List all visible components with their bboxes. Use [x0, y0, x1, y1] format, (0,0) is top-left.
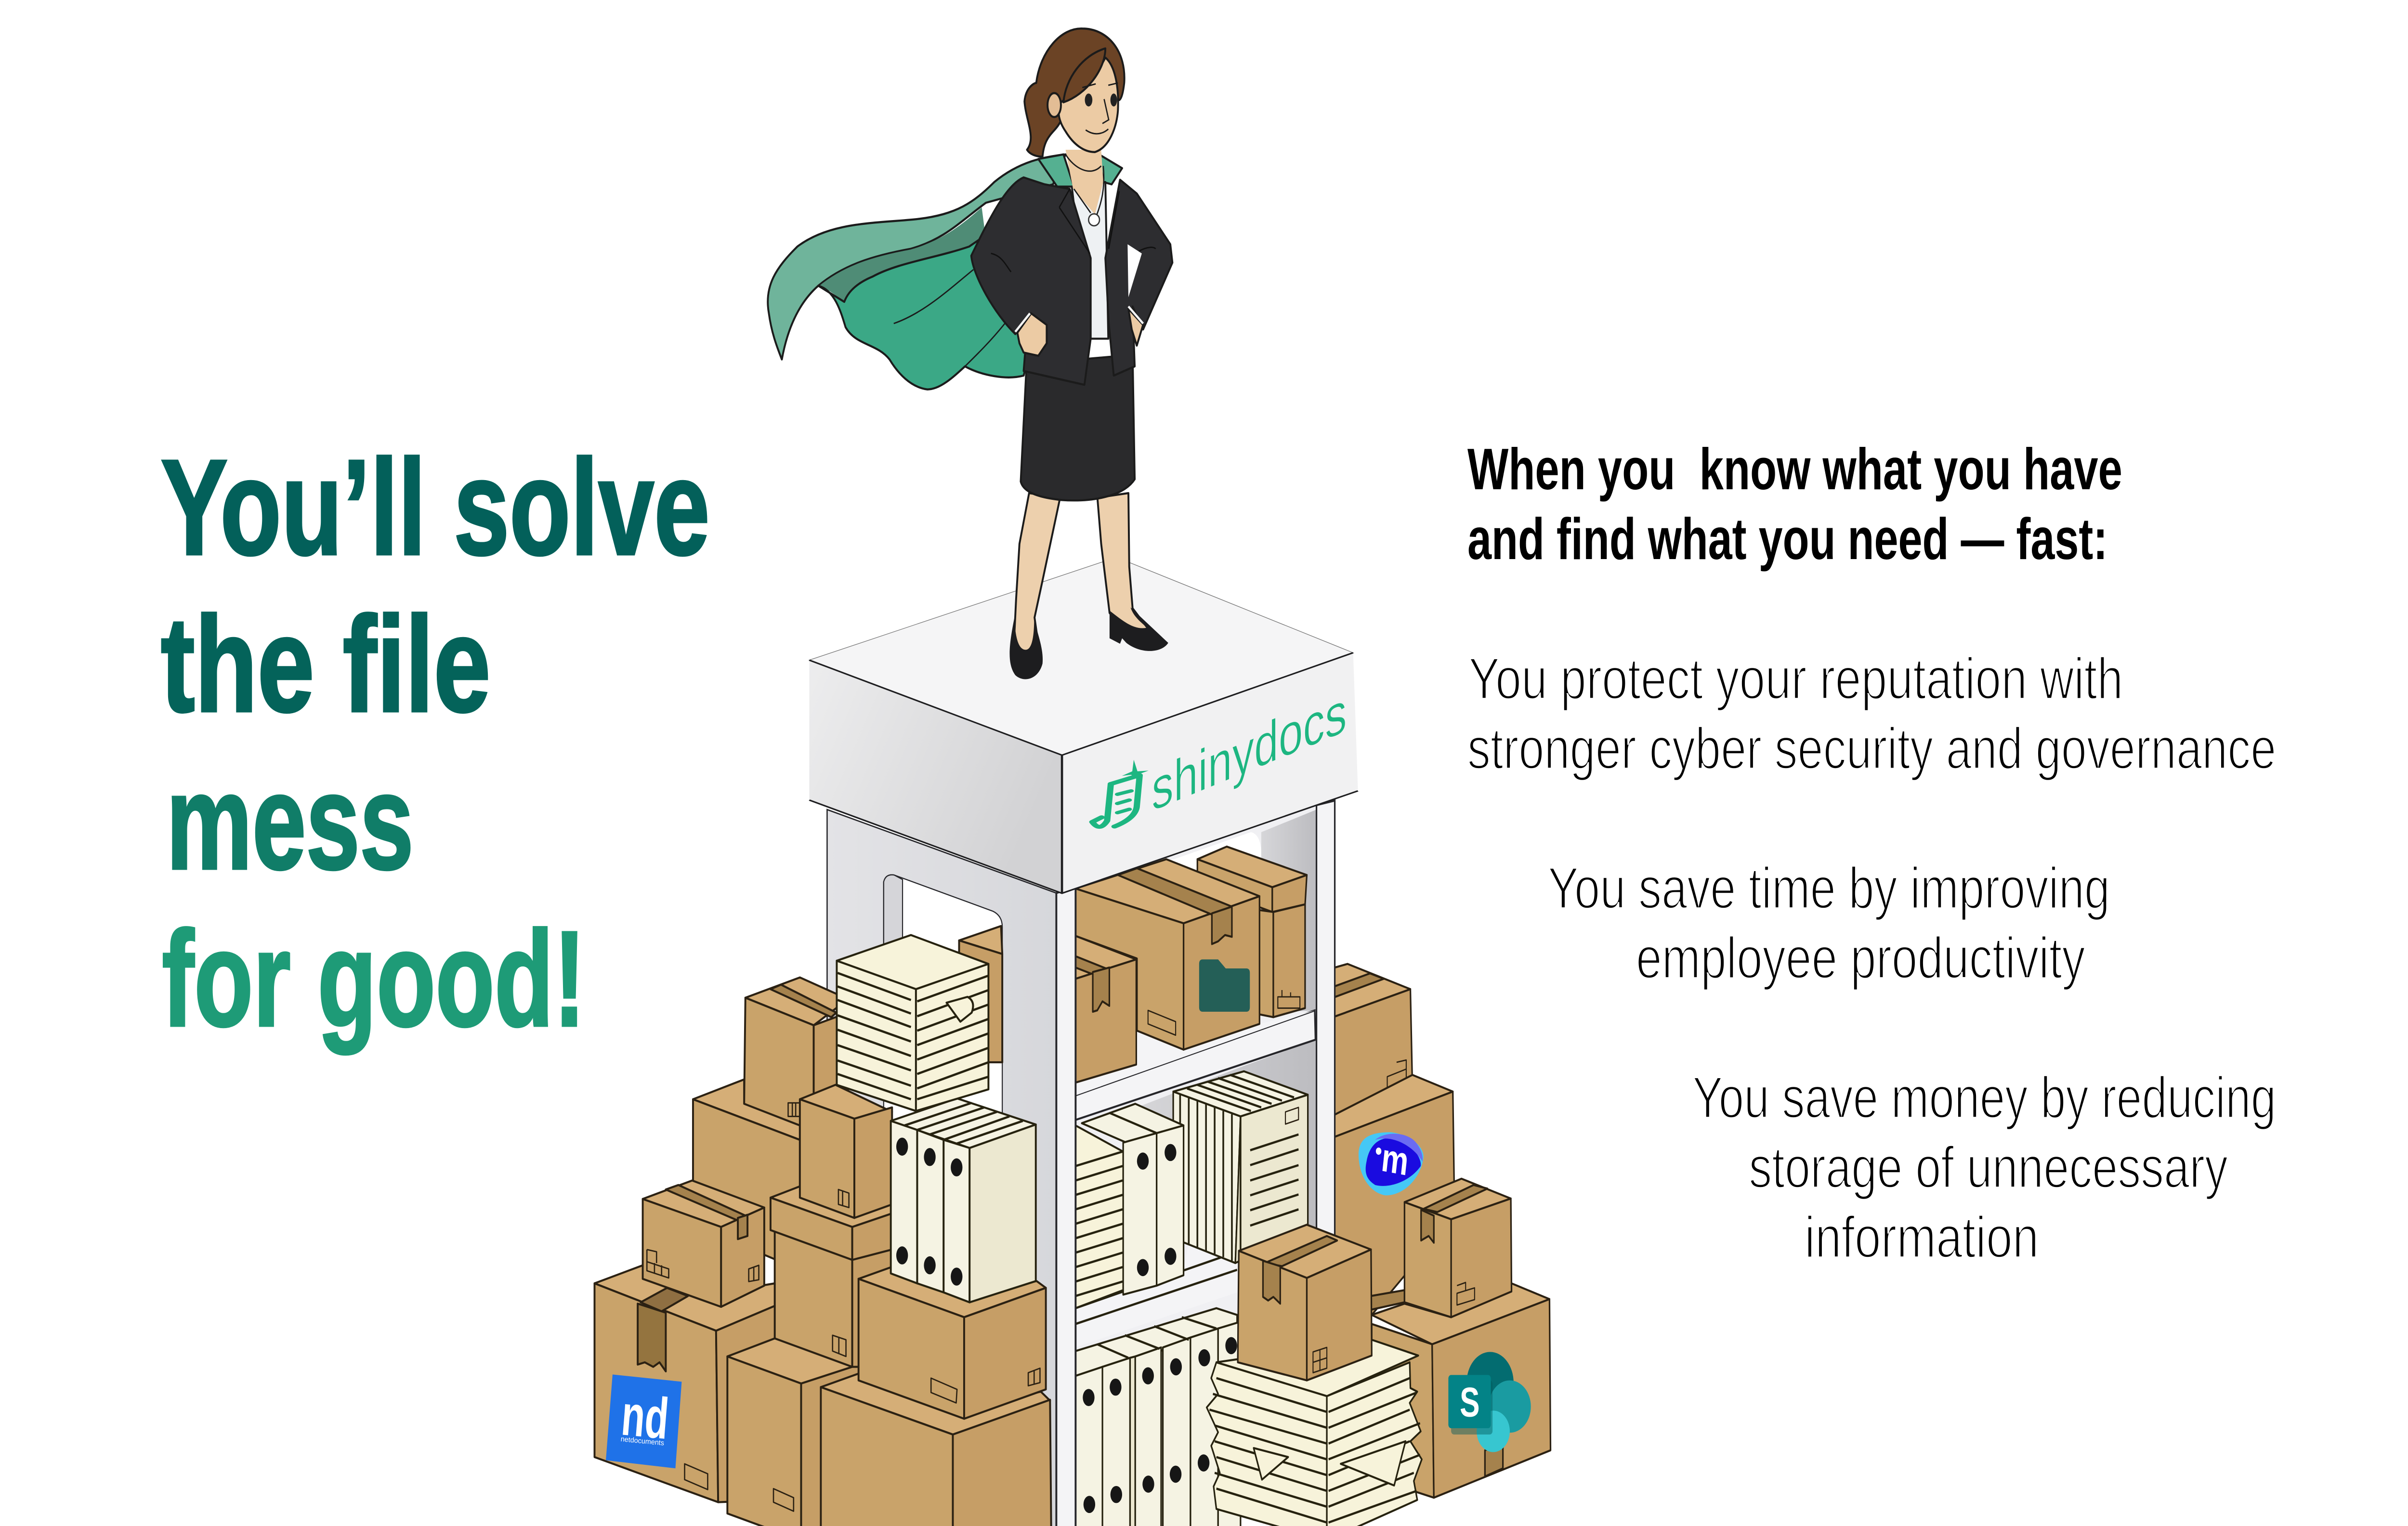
- logo: netdocuments: [606, 1374, 681, 1468]
- title: for good!: [162, 903, 586, 1055]
- cape: [768, 155, 1122, 390]
- pile of boxes and binders on the left: [594, 926, 1051, 1526]
- box: front left: [727, 1338, 861, 1526]
- paper stack on middle shelf: [1075, 1125, 1123, 1308]
- grey side panel upper: [1261, 809, 1317, 1013]
- benefit: save time: You save time by improving: [1548, 856, 2110, 921]
- binders stack: [891, 1098, 1036, 1302]
- title: the file: [161, 589, 491, 741]
- logo mark: [1092, 775, 1139, 827]
- messy paper pile: [1207, 1340, 1422, 1526]
- head: [1024, 28, 1125, 157]
- benefit: save money: information: [1805, 1205, 2039, 1270]
- logo: iManage: m: [1379, 1135, 1411, 1184]
- logo: SharePoint: S: [1460, 1380, 1480, 1426]
- box: upper left: [744, 978, 848, 1135]
- left face: [809, 660, 1062, 893]
- shoes: [1009, 607, 1168, 679]
- title: You’ll solve: [161, 432, 710, 584]
- benefit: protect reputation: stronger cyber security and governance: [1467, 716, 2276, 781]
- box: small upper center: [800, 1085, 892, 1218]
- benefit: protect reputation: You protect your reputation with: [1468, 646, 2123, 711]
- box: small mid left: [643, 1180, 764, 1307]
- box: center under binders: [859, 1267, 1046, 1419]
- top face: [809, 557, 1353, 755]
- left side panel of the shelf: [827, 809, 1075, 1526]
- benefit: save money: storage of unnecessary: [1749, 1135, 2228, 1200]
- upper opening: [1161, 832, 1261, 909]
- logo: SharePoint: [1448, 1352, 1531, 1452]
- shelving unit with contents: [1064, 792, 1335, 1526]
- title: [161, 432, 710, 1055]
- grey side panel middle: [1137, 1040, 1317, 1227]
- front post: [1056, 887, 1075, 1526]
- right post: [1317, 801, 1335, 1405]
- shelf boards: [1064, 1010, 1315, 1351]
- title: mess: [166, 746, 414, 898]
- binders on bottom shelf: [1075, 1308, 1241, 1526]
- logo: netdocuments: netdocuments: [620, 1435, 665, 1448]
- benefit: save time: employee productivity: [1636, 926, 2085, 991]
- benefit: protect reputation: [1467, 646, 2276, 781]
- heading: know what you have: [1467, 437, 2122, 572]
- right face: [1062, 653, 1358, 893]
- benefit: save money: You save money by reducing: [1692, 1065, 2276, 1130]
- paper stack: [837, 935, 988, 1111]
- illustration: boxes behind the shelf on the right: [1327, 964, 1454, 1319]
- logo: netdocuments: nd: [619, 1383, 671, 1451]
- box: bottom right: [1372, 1283, 1551, 1498]
- panel window: [884, 875, 1002, 1135]
- benefit: save money: [1692, 1065, 2276, 1270]
- box peeking through window: [959, 926, 1002, 1062]
- logo: iManage: [1359, 1132, 1424, 1195]
- top box of the pedestal: [809, 557, 1358, 893]
- jacket: [971, 177, 1172, 385]
- paper pile, boxes and logos on the right front: [1207, 1132, 1551, 1526]
- blouse and neck: [1066, 150, 1108, 339]
- box: on paper pile: [1238, 1225, 1372, 1381]
- box: bottom center large: [821, 1374, 1051, 1526]
- shelf back wall: [1064, 792, 1317, 1526]
- skirt: [1021, 355, 1135, 500]
- small box on top shelf: [1075, 936, 1136, 1083]
- icon: folder: [1199, 959, 1250, 1012]
- logo wordmark: shinydocs: shinydocs: [1152, 678, 1347, 824]
- binders on middle shelf: [1082, 1104, 1184, 1295]
- benefits text block: [1467, 437, 2276, 1270]
- back box on top shelf: [1197, 847, 1307, 1017]
- large box on top shelf: [1075, 859, 1259, 1050]
- benefit: save time: [1548, 856, 2110, 991]
- woman with green cape: [768, 28, 1172, 679]
- heading: know what you have: and find what you need — fast:: [1467, 507, 2107, 572]
- heading: know what you have: When you know what you have: [1467, 437, 2122, 502]
- box: small right: [1404, 1179, 1512, 1317]
- box: central tall: [775, 1225, 894, 1374]
- thin files and document on middle shelf: [1173, 1071, 1308, 1263]
- box: big bottom left: [594, 1265, 775, 1502]
- box: large rear left: [693, 1080, 800, 1270]
- box: central lid: [771, 1187, 892, 1260]
- legs: [1013, 493, 1153, 659]
